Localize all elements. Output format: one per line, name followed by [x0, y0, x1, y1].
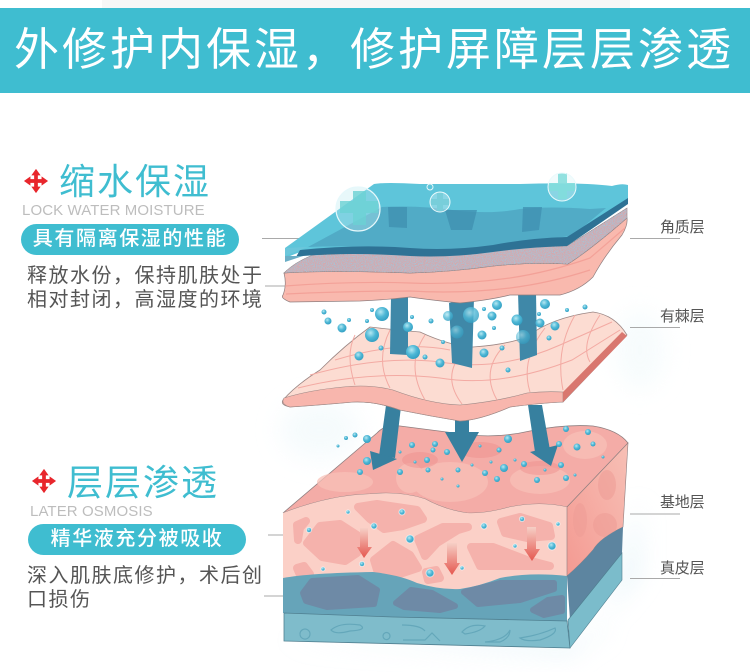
top face blobs — [317, 431, 607, 502]
corneum layer — [282, 173, 628, 303]
label: basal layer: 基地层 — [660, 494, 704, 511]
teal layer squiggles — [300, 624, 555, 642]
sheet body — [282, 312, 627, 421]
english subtitle: LOCK WATER MOISTURE — [22, 202, 205, 219]
block side face — [567, 443, 628, 576]
section one: lock water moisture — [21, 161, 264, 311]
upper arrow shafts — [390, 292, 537, 368]
side cell marks — [573, 470, 617, 537]
pink lower layer front — [282, 218, 627, 303]
block front: pink epidermis — [283, 493, 567, 595]
sheet grid lines — [298, 315, 620, 404]
dermis darker blobs — [303, 578, 562, 615]
body text: 相对封闭，高湿度的环境 — [27, 289, 264, 311]
water droplets in the front face — [306, 509, 560, 577]
block top face — [283, 426, 628, 513]
blue sheet top — [285, 183, 628, 258]
arrow shadows in blue sheet — [388, 207, 542, 232]
water droplets on block top — [336, 426, 604, 488]
front teal layer — [284, 613, 570, 648]
label: stratum corneum: 角质层 — [660, 219, 704, 236]
label: dermis: 真皮层 — [660, 560, 704, 577]
label: spinous layer: 有棘层 — [660, 308, 704, 325]
heading: 层层渗透 — [67, 462, 219, 503]
title banner: 外修护内保湿，修护屏障层层渗透 — [14, 24, 734, 75]
heading: 缩水保湿 — [59, 161, 211, 202]
pill label: 具有隔离保湿的性能 — [33, 228, 227, 250]
pill label — [28, 524, 246, 555]
side dermis — [567, 527, 623, 620]
body text — [27, 265, 264, 311]
section two: later osmosis — [27, 462, 264, 611]
icon: red cross arrows — [32, 469, 56, 493]
spinous layer sheet — [282, 312, 627, 421]
body text — [27, 565, 264, 611]
title banner — [0, 8, 750, 93]
lower arrow shafts and heads — [370, 398, 558, 470]
pill label: 精华液充分被吸收 — [51, 528, 223, 550]
body text: 释放水份，保持肌肤处于 — [27, 265, 264, 287]
blue sheet front dark band — [296, 198, 628, 257]
blue sheet translucent shade — [308, 206, 606, 250]
side teal — [568, 553, 622, 648]
english subtitle: LATER OSMOSIS — [30, 503, 153, 520]
blue sheet left tip edge — [285, 247, 308, 256]
plus icons and bubbles — [336, 173, 576, 231]
icon: red cross arrows — [24, 169, 48, 193]
callout lines — [262, 238, 680, 596]
pill label — [21, 224, 239, 255]
front cell blobs — [297, 504, 551, 580]
sheet side edge — [563, 332, 627, 402]
speckled layer — [284, 208, 627, 273]
body text: 口损伤 — [27, 589, 92, 611]
soft background glow — [280, 310, 665, 655]
sheet front edge — [283, 386, 563, 421]
front dermis blue — [283, 572, 567, 621]
speckle texture — [284, 208, 627, 273]
water droplets between layers — [322, 299, 588, 372]
body text: 深入肌肤底修护，术后创 — [27, 565, 264, 587]
pink layer stripes — [285, 228, 625, 294]
faint background strip at top — [102, 0, 630, 8]
red arrows in the epidermis — [357, 527, 540, 575]
layer block: basal layer and dermis — [283, 426, 628, 648]
